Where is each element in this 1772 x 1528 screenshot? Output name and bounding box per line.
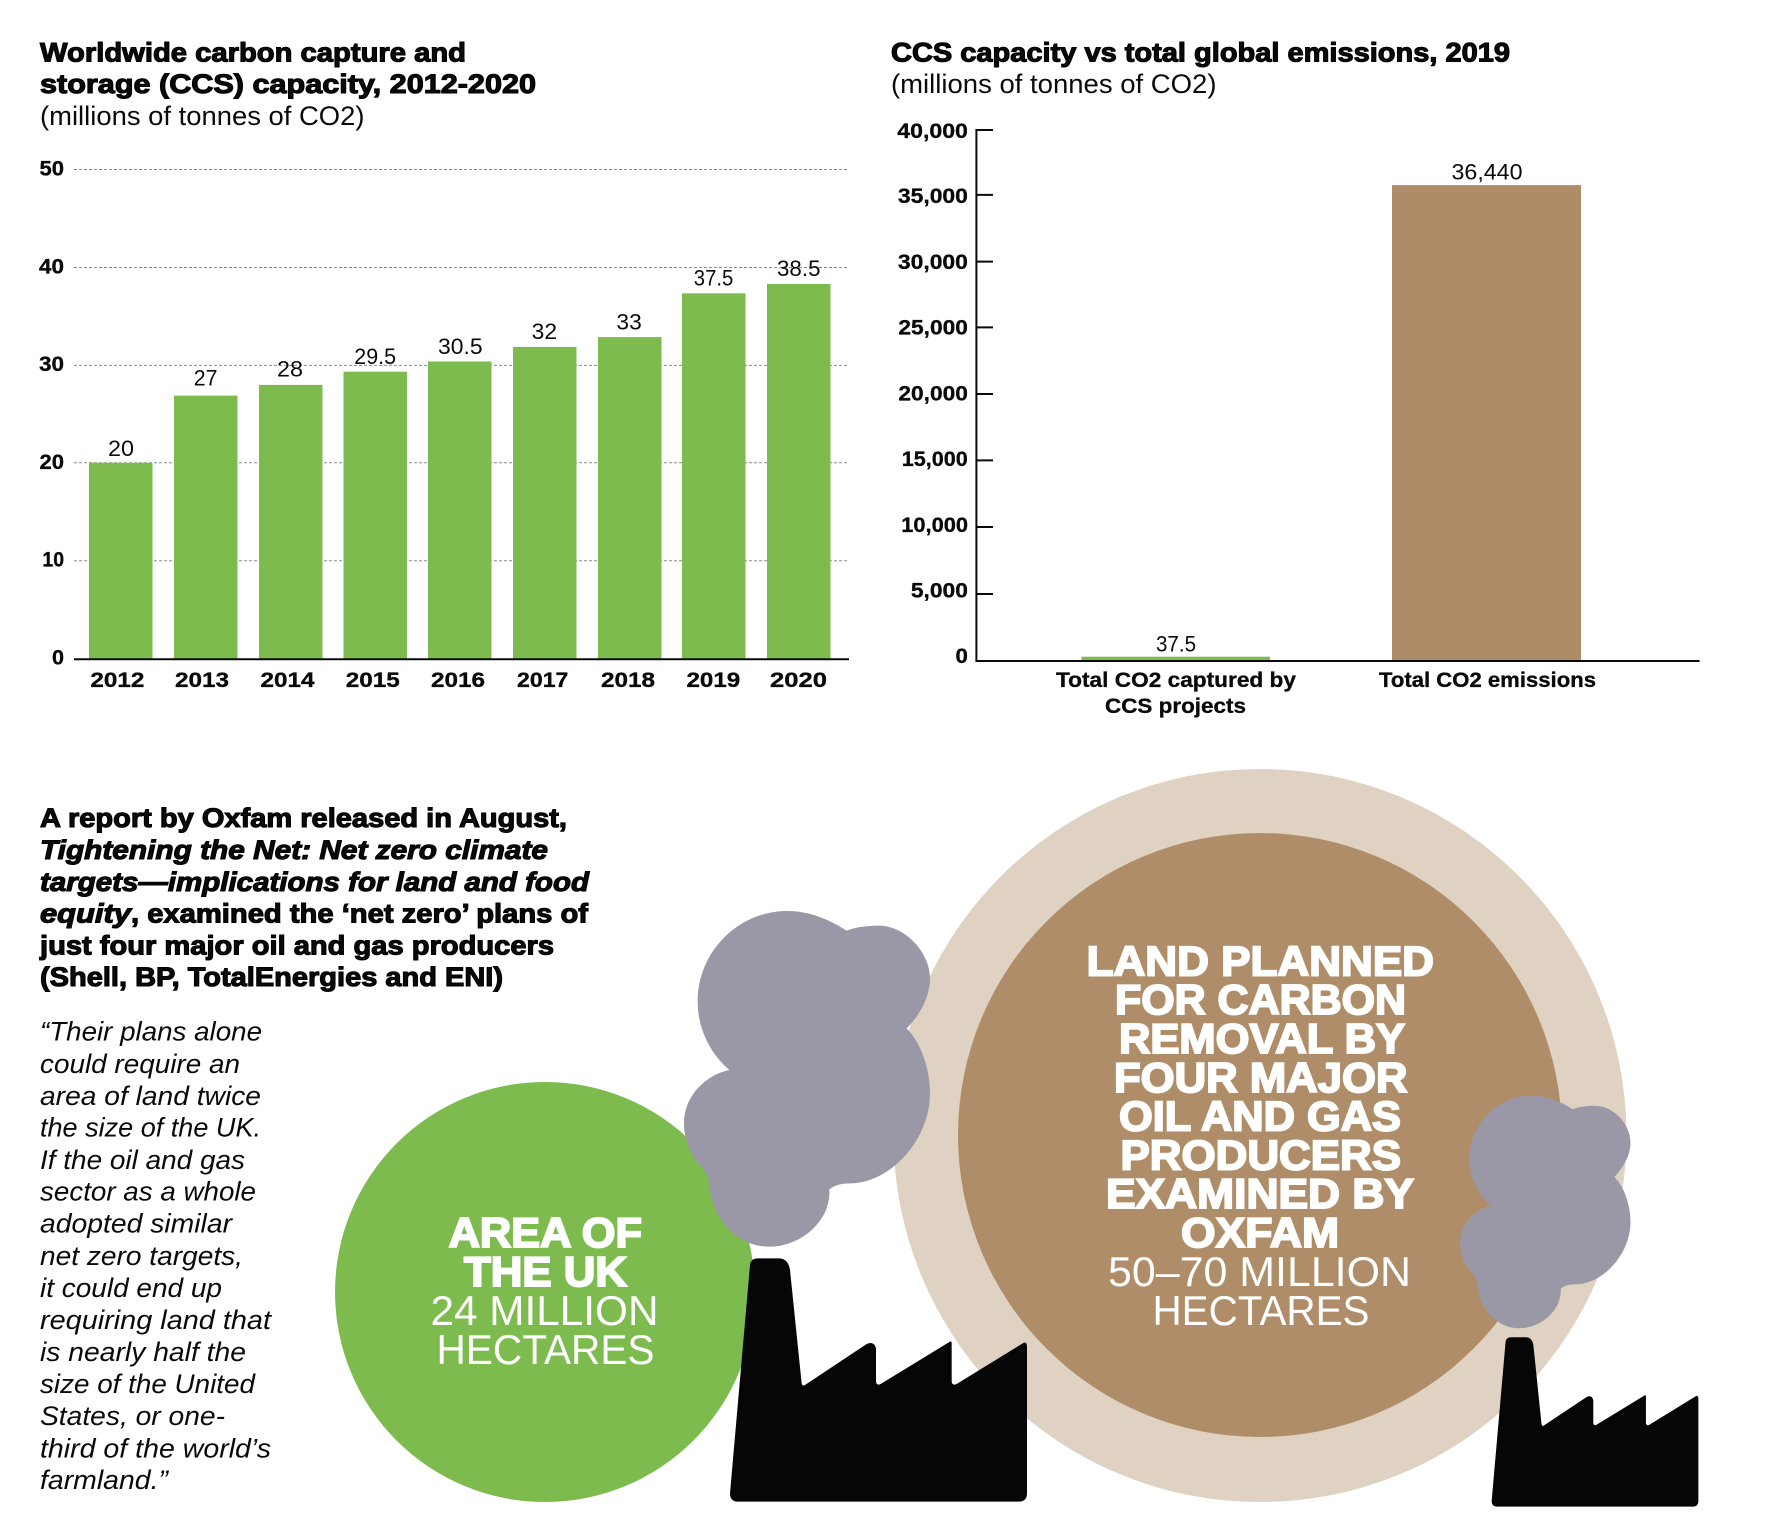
label: area of the UK: AREA OF <box>449 1209 642 1256</box>
text block: Oxfam report summary: A report by Oxfam released in August, <box>40 803 567 833</box>
text block: italic quote: requiring land that <box>40 1305 273 1335</box>
y axis labels: 5,000 <box>911 579 968 602</box>
bar value labels: 29.5 <box>354 344 396 369</box>
text block: Oxfam report summary: (Shell, BP, TotalEnergies and ENI) <box>40 962 503 992</box>
x axis year labels: 2018 <box>601 669 655 692</box>
bars <box>89 284 830 659</box>
bar value labels: 33 <box>616 309 642 334</box>
bar: total CO2 captured <box>1082 657 1270 661</box>
text block: italic quote: it could end up <box>40 1273 222 1303</box>
text block: italic quote: could require an <box>40 1049 240 1079</box>
heading: CCS vs emissions: (millions of tonnes of CO2) <box>891 69 1216 99</box>
label: land planned: 50–70 MILLION <box>1108 1248 1411 1295</box>
y axis labels: 25,000 <box>898 317 968 340</box>
label: land planned: HECTARES <box>1152 1287 1370 1334</box>
text block: italic quote: size of the United <box>40 1369 256 1399</box>
y axis labels: 20 <box>40 451 64 474</box>
icon: small smoke cloud <box>1460 1096 1630 1328</box>
heading: worldwide CCS capacity: storage (CCS) capacity, 2012-2020 <box>40 69 536 99</box>
label: land planned: OIL AND GAS <box>1119 1092 1401 1140</box>
category labels: CCS projects <box>1105 695 1246 718</box>
label: land planned: FOUR MAJOR <box>1114 1054 1408 1101</box>
circle: land planned for carbon removal <box>958 833 1562 1437</box>
y axis labels: 50 <box>40 157 64 180</box>
category labels <box>1056 669 1596 718</box>
text block: italic quote: “Their plans alone <box>40 1017 262 1047</box>
label: area of the UK: 24 MILLION <box>430 1287 658 1334</box>
icon: large factory <box>730 1258 1027 1502</box>
text block: Oxfam report summary: just four major oil and gas producers <box>39 930 554 960</box>
x axis year labels: 2012 <box>90 669 144 692</box>
bar: total CO2 emissions <box>1392 185 1581 661</box>
x axis year labels: 2019 <box>686 669 740 692</box>
icon: large smoke cloud <box>684 911 930 1247</box>
circle: land planned outer ring <box>894 769 1626 1502</box>
value labels: 36,440 <box>1452 159 1522 184</box>
heading: worldwide CCS capacity: (millions of tonnes of CO2) <box>40 101 364 131</box>
icon: small factory <box>1492 1337 1698 1507</box>
y axis labels: 10,000 <box>901 514 968 537</box>
y axis labels <box>39 157 64 669</box>
y axis labels: 30,000 <box>898 251 968 274</box>
label: land planned <box>1087 938 1434 1334</box>
label: land planned: OXFAM <box>1181 1209 1339 1256</box>
text block: italic quote: farmland.” <box>40 1465 169 1495</box>
text block: italic quote: States, or one- <box>40 1401 225 1431</box>
bar value labels: 30.5 <box>438 334 483 359</box>
x axis year labels: 2017 <box>517 669 568 692</box>
text block: italic quote: net zero targets, <box>40 1241 243 1271</box>
y axis labels: 40,000 <box>897 120 968 143</box>
y axis labels: 0 <box>52 646 64 670</box>
text block: Oxfam report summary: , examined the ‘net zero’ plans of <box>131 898 589 928</box>
category labels: Total CO2 emissions <box>1379 669 1596 692</box>
text block: italic quote: third of the world’s <box>40 1433 271 1463</box>
x axis year labels: 2015 <box>346 669 400 692</box>
label: area of the UK <box>430 1209 658 1373</box>
y axis labels: 10 <box>42 549 64 572</box>
text block: italic quote: the size of the UK. <box>40 1113 261 1143</box>
text block: Oxfam report summary: targets—implications for land and food <box>40 867 590 897</box>
bar value labels: 38.5 <box>777 256 820 281</box>
bar value labels: 20 <box>108 436 134 461</box>
x axis year labels: 2020 <box>770 669 827 692</box>
text block: Oxfam report summary <box>39 803 590 992</box>
y axis labels: 15,000 <box>902 448 968 471</box>
axes <box>976 130 1700 661</box>
value labels: 37.5 <box>1156 631 1196 656</box>
text block: italic quote: is nearly half the <box>40 1337 246 1367</box>
panel: worldwide CCS capacity bar chart <box>39 38 849 692</box>
heading: worldwide CCS capacity <box>40 38 536 131</box>
text block: italic quote: sector as a whole <box>40 1176 256 1206</box>
label: area of the UK: THE UK <box>464 1248 627 1295</box>
y axis labels: 30 <box>39 353 64 376</box>
label: land planned: EXAMINED BY <box>1106 1170 1414 1217</box>
bar value labels: 32 <box>532 319 557 344</box>
bar value labels: 28 <box>277 357 303 382</box>
bar value labels <box>108 256 820 461</box>
label: area of the UK: HECTARES <box>436 1326 654 1373</box>
x axis year labels <box>90 669 827 692</box>
heading: worldwide CCS capacity: Worldwide carbon capture and <box>40 38 466 68</box>
label: land planned: LAND PLANNED <box>1087 938 1434 984</box>
text block: italic quote: adopted similar <box>40 1209 233 1239</box>
bar value labels: 37.5 <box>694 266 733 290</box>
label: land planned: FOR CARBON <box>1115 976 1406 1023</box>
text block: Oxfam report summary: equity <box>40 898 133 928</box>
circle: area of the UK <box>335 1082 755 1502</box>
y axis labels: 40 <box>39 255 64 278</box>
x axis year labels: 2016 <box>431 669 485 692</box>
label: land planned: PRODUCERS <box>1120 1132 1401 1178</box>
panel: CCS capacity vs total emissions bar chart <box>891 38 1700 718</box>
text block: italic quote: area of land twice <box>40 1081 261 1111</box>
text block: italic quote: If the oil and gas <box>40 1145 245 1175</box>
category labels: Total CO2 captured by <box>1056 669 1296 692</box>
text block: Oxfam report summary: Tightening the Net: Net zero climate <box>40 835 548 865</box>
heading: CCS vs emissions: CCS capacity vs total global emissions, 2019 <box>891 38 1510 68</box>
y axis labels: 0 <box>956 645 968 668</box>
value labels <box>1156 159 1522 656</box>
heading: CCS vs emissions <box>891 38 1510 99</box>
y axis labels <box>897 120 968 668</box>
label: land planned: REMOVAL BY <box>1119 1015 1405 1062</box>
y axis labels: 20,000 <box>898 382 968 406</box>
x axis year labels: 2014 <box>260 669 315 692</box>
y axis labels: 35,000 <box>898 185 968 208</box>
bar value labels: 27 <box>194 365 218 390</box>
x axis year labels: 2013 <box>175 669 229 692</box>
text block: italic quote <box>40 1017 273 1495</box>
